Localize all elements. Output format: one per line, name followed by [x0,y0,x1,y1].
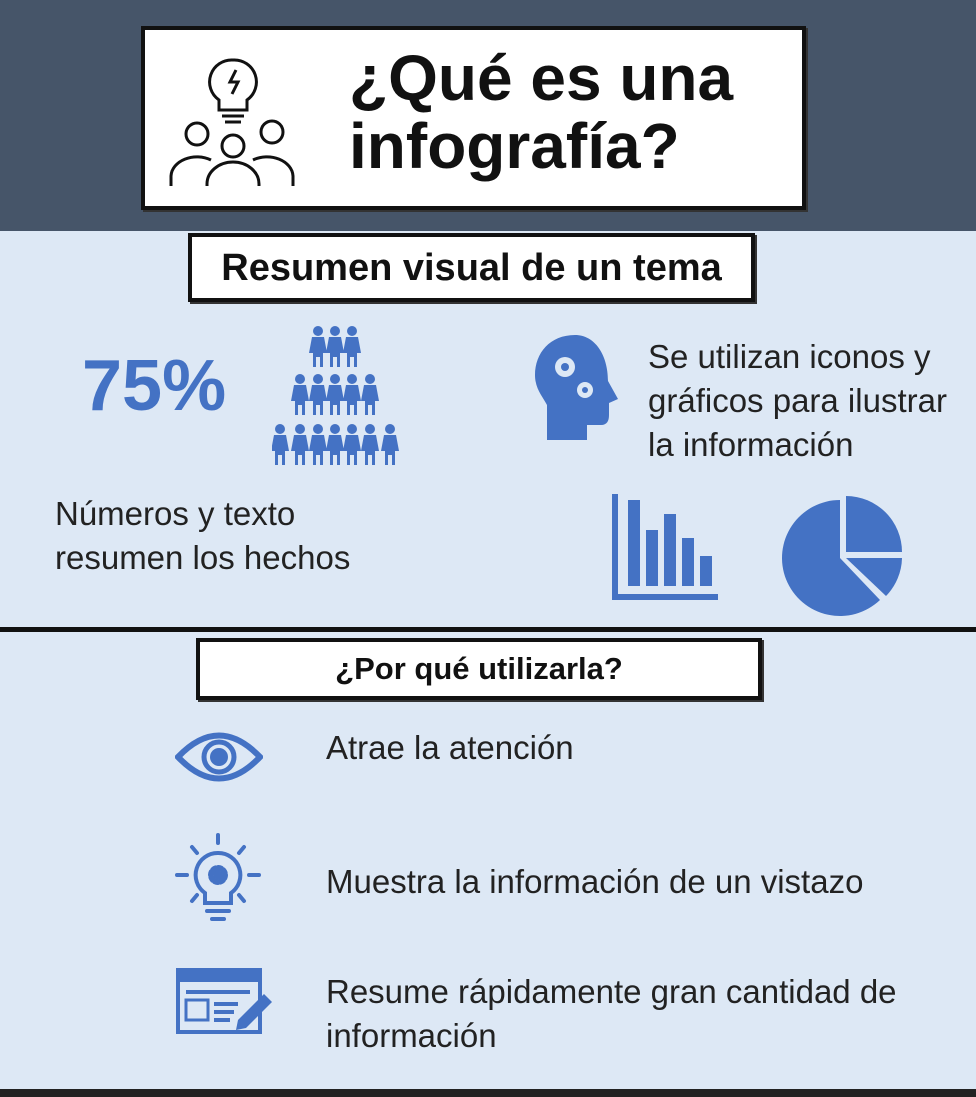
heading: resumen visual: Resumen visual de un tema [221,247,722,289]
icon: browser edit [176,968,272,1034]
heading: por qué [196,638,762,700]
title text: infografía? [349,110,680,182]
title text: ¿Qué es una [349,42,733,114]
stat: 75%: 75% [82,346,226,426]
divider [0,627,976,632]
icon: head gears [535,335,618,440]
bottom line [0,1089,976,1097]
text: muestra: Muestra la información de un vistazo [326,863,863,900]
text: iconos: gráficos para ilustrar [648,382,947,419]
text: resume: información [326,1017,497,1054]
text: iconos [648,338,947,463]
header band [0,0,976,231]
icon: bulb gear [175,833,261,921]
icon: people pyramid [272,326,399,465]
bar chart icon [612,494,718,600]
icon: idea people [170,58,294,186]
text: iconos: Se utilizan iconos y [648,338,930,375]
text: resume: Resume rápidamente gran cantidad de [326,973,897,1010]
text: atrae: Atrae la atención [326,729,574,766]
icon: eye [175,732,263,782]
heading: resumen visual [188,233,755,302]
text: iconos: la información [648,426,853,463]
text: resume [326,973,897,1054]
text: números: Números y texto [55,495,295,532]
heading: por qué: ¿Por qué utilizarla? [335,651,623,686]
text: números: resumen los hechos [55,539,350,576]
text: números [55,495,350,576]
title box [141,26,806,210]
title text [349,42,734,182]
pie chart icon [782,496,902,616]
